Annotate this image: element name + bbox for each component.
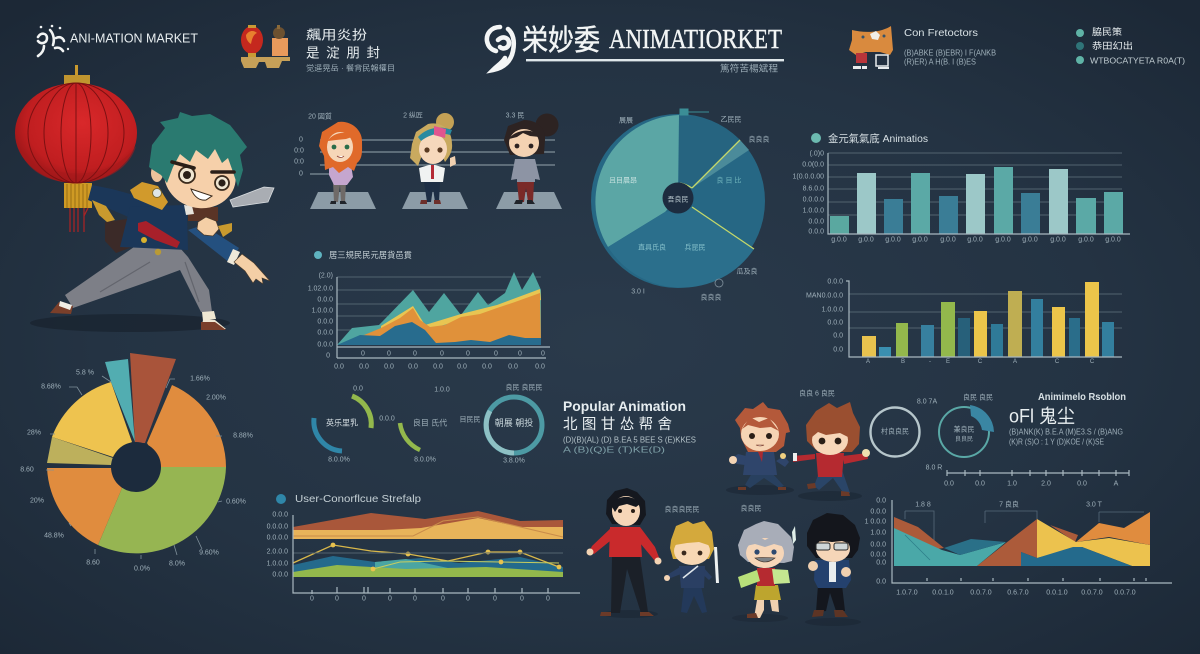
donut: labels: 8.60: [20, 466, 34, 474]
warrior: pants: [65, 247, 212, 312]
text block: popular animation: 北 图 甘 怂 帮 舍: [563, 416, 672, 433]
right gauge one: 村良良民: [881, 426, 909, 436]
character: dark-haired girl: [504, 114, 558, 204]
trio: axis labels: 0:0: [294, 148, 304, 154]
bar chart: bars: [830, 167, 1123, 234]
bar chart: x labels: g.0.0: [1022, 236, 1038, 244]
bar chart: x labels: g.0.0: [967, 236, 983, 244]
user chart: y labels: 0.0.0: [272, 572, 288, 578]
donut: labels: 0.0%: [134, 566, 150, 572]
layered chart: y labels: 1 0.0.0: [865, 518, 886, 526]
chart: layered areas bottom right: [865, 498, 1172, 596]
user chart: x labels: 0: [310, 596, 314, 602]
layered chart: y labels: 0.0: [876, 560, 886, 566]
area chart: x labels: 0.0: [433, 364, 443, 370]
warrior: sleeve right: [188, 225, 239, 263]
layered chart: blue: [1021, 547, 1132, 566]
header legend: 脇民策: [1092, 26, 1122, 37]
text block: animimelo region: (B)ANK(K) B.E.A (M)E3.S / (B)ANG: [1009, 428, 1123, 436]
character group: bottom four: [586, 488, 861, 626]
user chart: x labels: 0: [388, 596, 392, 602]
user chart: y labels: 2.0.0.0: [267, 548, 288, 556]
central pie: labels: 直具氏良: [638, 242, 666, 252]
donut: labels: 28%: [27, 430, 41, 436]
ring gauge one: 8.0.0%: [328, 456, 350, 464]
warrior: brows and mouth: [172, 162, 234, 172]
layered chart: y labels: 0.0: [876, 578, 886, 586]
character: red shirt man: [586, 488, 662, 616]
character pair: fighters: 良良 6 良民: [799, 388, 835, 398]
area chart: x labels: 0.0: [408, 364, 418, 370]
donut: labels: 5.8 %: [76, 370, 94, 376]
warrior: fist: [197, 217, 219, 236]
donut: labels: 20%: [30, 498, 44, 504]
layered chart: x labels: 0.0.7.0: [1114, 590, 1136, 596]
timeline axis: 0.0: [1077, 480, 1087, 488]
donut: labels: 2.00%: [206, 394, 226, 402]
multicolor y labels: 1.0.0.0: [822, 306, 843, 314]
labels above characters: 良良良民民: [664, 504, 700, 514]
warrior: belt and red pouch: [138, 221, 180, 248]
user chart: y labels: 1.0.0.0: [267, 560, 288, 568]
area chart: x labels: 0.0: [535, 364, 545, 370]
donut: leader lines: [46, 376, 222, 559]
header text block left: 是 淀 朋 封: [306, 46, 380, 60]
text block: popular animation: A (B)(Q)E (T)KE(D): [563, 446, 665, 454]
area chart: y labels: 0: [326, 352, 330, 360]
bar chart: heading: 金元氣氣底 Animatios: [828, 132, 928, 145]
ring gauge two: [379, 386, 450, 464]
area chart: market growth: [308, 250, 550, 370]
right gauge two: 良良民: [955, 435, 973, 443]
multicolor bars: [862, 282, 1114, 357]
bar chart: x labels: g.0.0: [1105, 236, 1121, 244]
trio: axis labels: 2 纵匠: [403, 112, 423, 120]
character: boy with glasses: [807, 513, 860, 617]
main title logo: 栄妙委: [522, 24, 600, 57]
layered chart: teal: [894, 528, 1006, 566]
header text block left: 觉遥晃岳 · 餐背民報權目: [306, 62, 395, 72]
bar chart: y labels: 8.6.0.0: [803, 186, 824, 192]
bar chart: y labels: 1(0.0.0.00: [792, 174, 824, 180]
user chart: x labels: 0: [413, 596, 417, 602]
area chart: heading: 居三規民民元居貨邑貫: [329, 250, 412, 260]
area chart: y labels: (2.0): [319, 272, 333, 280]
multicolor x labels: E: [946, 359, 950, 365]
area chart: orange series: [337, 293, 541, 345]
bar chart: y labels: 0.0(0.0: [802, 162, 824, 168]
area chart: teal series: [337, 272, 541, 345]
trio: platforms: [310, 192, 562, 209]
trio: guide lines: [310, 140, 555, 174]
central pie: labels: 良良良: [748, 134, 770, 144]
timeline axis: 0.0: [944, 480, 954, 488]
bar chart: y labels: (.0)0: [810, 150, 824, 158]
warrior: hand right: [234, 254, 270, 284]
donut: labels: 9.60%: [199, 550, 219, 556]
donut: labels: 1.66%: [190, 376, 210, 382]
warrior: sword: [230, 187, 274, 207]
header text block: con fretoctors: (B)ABKE (B)EBR) I F(ANKB: [904, 48, 996, 58]
central pie: labels: 且目晨昂: [609, 176, 637, 184]
user chart: x labels: 0: [466, 596, 470, 602]
area chart: y labels: 0.0.0: [317, 342, 333, 348]
ring gauge one: 0.0: [353, 386, 363, 392]
header legend: 恭田幻出: [1092, 40, 1133, 51]
layered chart: x labels: 0.0.1.0: [1046, 590, 1068, 596]
multicolor y labels: 0.0: [833, 332, 843, 340]
layered chart: x labels: 0.0.7.0: [970, 590, 992, 596]
area chart: y labels: 1.02.0.0: [308, 286, 333, 292]
timeline axis: 8.0 R: [926, 464, 942, 472]
trio: axis labels: 20 図質: [308, 112, 332, 120]
bar chart: x labels: g.0.0: [1050, 236, 1066, 244]
ring gauge three: 朝展 朝投: [495, 417, 533, 428]
central pie: labels: 良良良: [700, 292, 722, 302]
header logo: animation market: ANI-MATION MARKET: [70, 32, 198, 46]
donut: labels: 8.0%: [169, 560, 185, 568]
multicolor y labels: 0.0: [833, 346, 843, 354]
main title logo: 篤符苦楊斌程: [720, 62, 778, 74]
bar chart: y labels: 0.0.0: [808, 218, 824, 226]
header legend: WTBOCATYETA R0A(T): [1090, 56, 1185, 66]
donut: labels: 8.60: [86, 560, 100, 566]
text block: animimelo region: [1009, 391, 1126, 446]
right gauge one: [870, 398, 937, 456]
donut: labels: 8.88%: [233, 432, 253, 440]
ring gauge two: 1.0.0: [434, 386, 450, 394]
area chart: y labels: 0.0.0: [317, 296, 333, 304]
warrior: boots: [50, 302, 73, 314]
central pie: labels: 良 目 比: [717, 176, 741, 184]
layered chart: y labels: 0.0: [876, 498, 886, 504]
bar chart: x labels: g.0.0: [995, 236, 1011, 244]
user chart: x labels: [310, 596, 550, 602]
trio: axis labels: 3.3 民: [506, 112, 524, 120]
header text block left: [306, 28, 395, 72]
user chart: x labels: 0: [335, 596, 339, 602]
bar chart: multicolor: [806, 278, 1122, 365]
layered chart: left brown: [894, 517, 944, 550]
ring gauge three: 3.8.0%: [503, 458, 525, 464]
area chart: x labels: 0.0: [508, 364, 518, 370]
illustration: warrior ground shadow: [30, 314, 230, 332]
layered chart: y labels: [865, 498, 886, 586]
text block: popular animation: [563, 398, 696, 454]
area chart: yellow series: [381, 289, 541, 332]
area chart: x labels: [334, 350, 545, 370]
warrior: gold shoulder ornaments: [130, 182, 168, 210]
donut: labels: 8.68%: [41, 384, 61, 390]
multicolor x labels: A: [866, 359, 870, 365]
bar chart: x labels: g.0.0: [912, 236, 928, 244]
layered chart: x labels: 0.6.7.0: [1007, 590, 1029, 596]
multicolor x labels: A: [1013, 359, 1017, 365]
user chart: lower band: [293, 556, 563, 577]
central pie: slices: [591, 114, 765, 288]
user chart: x labels: 0: [362, 596, 366, 602]
area chart: y labels: [308, 272, 333, 360]
layered chart: x labels: 1.0.7.0: [896, 590, 918, 596]
bar chart: x labels: [831, 236, 1121, 244]
ring gauge three: 目民民: [460, 416, 480, 424]
character: red-haired boy: [729, 402, 790, 490]
warrior: sleeve left: [88, 185, 186, 245]
warrior: eyes: [179, 167, 195, 183]
header icon: lantern and figure: [241, 25, 290, 68]
right gauge two: 兼良民: [954, 424, 974, 434]
central pie: labels: 瓜及良: [736, 266, 758, 276]
text block: animimelo region: (K)R (S)O : 1 Y (D)KOE / (K)SE: [1009, 438, 1104, 446]
layered chart: orange: [1076, 512, 1150, 545]
ring gauge three: 良民 良民民: [506, 382, 542, 392]
central pie: labels: 3.0 I: [631, 288, 645, 296]
layered chart: y labels: 1.0.0: [870, 530, 886, 536]
ring gauge two: 0.0.0: [379, 416, 395, 422]
text block: animimelo region: Animimelo Rsoblon: [1038, 391, 1126, 403]
timeline axis: 1.0: [1007, 480, 1017, 488]
trio: axis labels: 0: [299, 136, 303, 144]
bar chart: x labels: g.0.0: [831, 236, 847, 244]
area chart: x labels: 0.0: [457, 364, 467, 370]
warrior: torso jacket: [120, 205, 188, 250]
multicolor x labels: C: [978, 359, 983, 365]
bar chart: x labels: g.0.0: [858, 236, 874, 244]
central pie: labels: 兵昆民: [684, 242, 706, 252]
character pair: fighters: [726, 388, 870, 501]
bar chart: y labels: [792, 150, 824, 236]
character: silver-haired kid: [738, 521, 796, 618]
bar chart: x labels: g.0.0: [1078, 236, 1094, 244]
warrior: face: [157, 136, 243, 216]
bar chart: animatios: [792, 132, 1130, 244]
trio of standing characters: [294, 112, 562, 209]
right gauge one: 8.0 7A: [917, 398, 937, 406]
character: red-haired girl: [319, 122, 362, 204]
illustration: warrior character: [50, 112, 274, 330]
area chart: x labels: 0.0: [359, 364, 369, 370]
central pie: labels: 展展: [619, 116, 633, 124]
area chart: y labels: 0.0.0: [317, 330, 333, 336]
layered chart: y labels: 0.0.0: [870, 508, 886, 516]
ring gauge row: [314, 382, 542, 464]
area chart: x labels: 0.0: [482, 364, 492, 370]
layered chart: yellow: [1037, 519, 1150, 566]
header icon: orange box mascot: [849, 26, 893, 69]
character: blond boy with sword: [664, 521, 719, 613]
trio: axis labels: 0: [299, 170, 303, 178]
layered chart: top labels: [915, 500, 1103, 508]
donut: labels: [20, 370, 253, 572]
ring gauge two: 良目 氏代: [413, 418, 447, 428]
user chart: x labels: 0: [546, 596, 550, 602]
layered chart: y labels: 0.0.0: [870, 542, 886, 548]
area chart: user conversion: [267, 493, 580, 602]
area chart: x labels: 0.0: [334, 364, 344, 370]
trio: axis labels: [294, 112, 524, 178]
pie chart: large donut: [20, 353, 253, 572]
area chart: x labels: 0: [518, 350, 522, 358]
central pie: tab: [680, 109, 709, 115]
character: blonde girl: [410, 113, 456, 204]
layered chart: brackets: [905, 511, 1144, 566]
area chart: x labels: 0: [387, 350, 391, 358]
header logo: animation market: [38, 25, 198, 56]
layered chart: x labels: 0.0.7.0: [1081, 590, 1103, 596]
area chart: x labels: 0.0: [384, 364, 394, 370]
bar chart: x labels: g.0.0: [940, 236, 956, 244]
layered chart: top labels: 1.8 8: [915, 502, 931, 508]
warrior: pouch and back cloth: [105, 218, 140, 253]
user chart: y labels: 0.0.0: [272, 512, 288, 518]
user chart: y labels: 0.0.0.0: [267, 534, 288, 542]
text block: animimelo region: oFl 鬼尘: [1009, 406, 1075, 428]
multicolor y labels: [806, 278, 843, 354]
bar chart: y labels: 1.0.0.0: [803, 208, 824, 214]
text block: popular animation: Popular Animation: [563, 398, 686, 414]
multicolor x labels: B: [901, 359, 905, 365]
multicolor y labels: 0.0.0: [827, 278, 843, 286]
timeline axis: [926, 464, 1129, 488]
layered chart: mid dark teal: [944, 539, 1006, 555]
layered chart: top labels: 7 良良: [999, 500, 1019, 508]
character: red-jacket boy: [793, 402, 870, 496]
header text block: con fretoctors: Con Fretoctors: [904, 27, 978, 39]
layered chart: x labels: [896, 590, 1136, 596]
timeline axis: A: [1114, 480, 1119, 488]
bar chart: y labels: 0.0.0: [808, 228, 824, 236]
area chart: x labels: 0: [494, 350, 498, 358]
multicolor y labels: MAN0.0.0.0: [806, 292, 843, 300]
warrior: hair: [149, 112, 247, 187]
area chart: x labels: 0: [541, 350, 545, 358]
labels above characters: [664, 504, 762, 514]
layered chart: small brown: [1050, 525, 1078, 542]
right gauge two: [939, 392, 994, 457]
user chart: heading: User-Conorflcue Strefalp: [295, 493, 421, 505]
timeline axis: 2.0: [1041, 480, 1051, 488]
header text block left: 飆用炎扮: [306, 28, 367, 42]
multicolor x labels: -: [929, 359, 931, 365]
user chart: x labels: 0: [493, 596, 497, 602]
main title logo: ANIMATIORKET: [609, 24, 782, 54]
area chart: x labels: 0: [413, 350, 417, 358]
header text block: con fretoctors: [904, 27, 996, 66]
layered chart: top labels: 3.0 T: [1086, 502, 1103, 508]
ring gauge two: 8.0.0%: [414, 456, 436, 464]
multicolor x labels: C: [1055, 359, 1060, 365]
central pie: labels: 乙民民: [720, 116, 742, 124]
layered chart: x labels: 0.0.1.0: [932, 590, 954, 596]
multicolor x labels: C: [1090, 359, 1095, 365]
ring gauges: right: [870, 392, 994, 457]
labels above characters: 良良民: [740, 504, 762, 512]
bar chart: y labels: 0.0.0.0: [803, 196, 824, 204]
user chart: y labels: [267, 512, 288, 578]
user chart: x labels: 0: [520, 596, 524, 602]
central pie: labels: 吾良民: [668, 194, 688, 204]
central pie: labels: [609, 116, 770, 302]
multicolor y labels: 0.0.0: [827, 320, 843, 326]
timeline axis: 0.0: [975, 480, 985, 488]
area chart: x labels: 0: [466, 350, 470, 358]
central pie: lime lines: [680, 140, 754, 249]
donut: labels: 0.60%: [226, 498, 246, 506]
donut: slices: [147, 385, 226, 467]
ring gauge one: [314, 386, 371, 464]
bar chart: x labels: g.0.0: [885, 236, 901, 244]
pie chart: central market share: [591, 109, 770, 302]
multicolor x labels: [866, 359, 1095, 365]
trio: axis labels: 0:0: [294, 158, 304, 166]
main title logo: [487, 24, 784, 74]
ring gauge three: [460, 382, 542, 464]
layered chart: y labels: 0.0.0: [870, 552, 886, 558]
right gauge two: 良民 良民: [963, 392, 993, 402]
header legend: [1076, 26, 1185, 66]
area chart: x labels: 0: [361, 350, 365, 358]
header text block: con fretoctors: (R)ER) A H(B. I (B)ES: [904, 58, 976, 66]
user chart: x labels: 0: [441, 596, 445, 602]
text block: popular animation: (D)(B)(AL) (D) B.EA 5 BEE S (E)KKES: [563, 436, 696, 444]
area chart: y labels: 0.0.0: [317, 318, 333, 326]
user chart: y labels: 0.0.0.0: [267, 524, 288, 530]
area chart: x labels: 0: [440, 350, 444, 358]
user chart: upper band: [293, 511, 563, 539]
area chart: y labels: 1.0.0.0: [312, 308, 333, 314]
warrior: collar: [184, 205, 194, 215]
donut: labels: 48.8%: [44, 532, 64, 540]
ring gauge one: 英乐里乳: [326, 418, 358, 428]
area chart: blue series: [337, 322, 541, 345]
illustration: red lantern: [15, 65, 137, 232]
user chart: lines: [293, 545, 559, 567]
layered chart: center brown: [977, 519, 1037, 566]
